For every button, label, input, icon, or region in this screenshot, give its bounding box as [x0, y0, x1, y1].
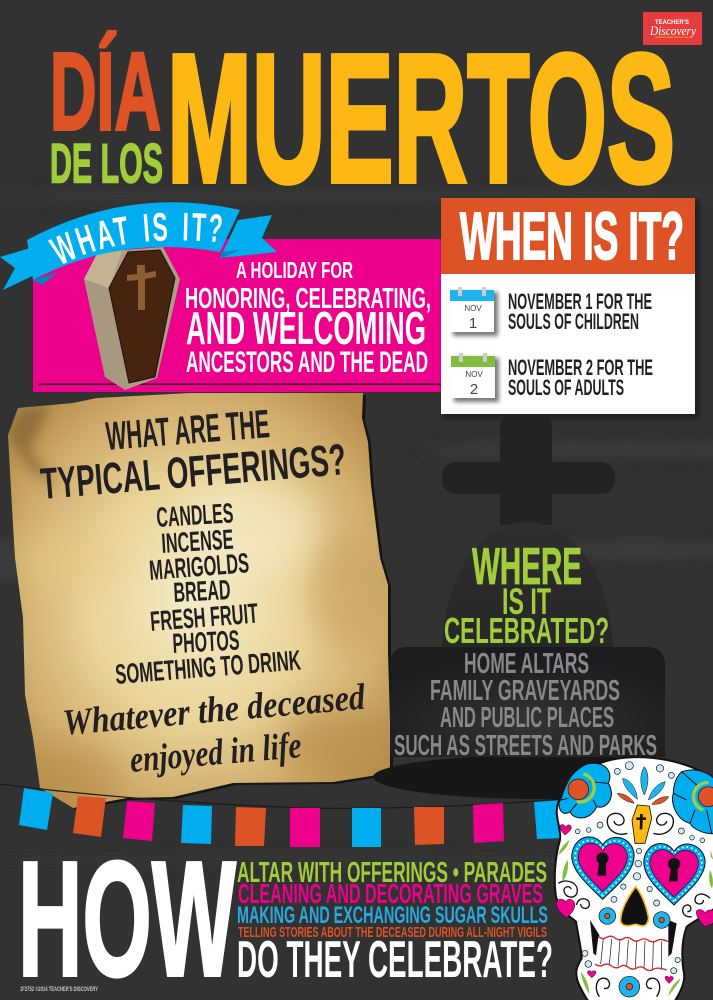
illustration: sugar skull	[555, 757, 713, 1000]
ribbon banner	[0, 202, 277, 290]
how list	[237, 857, 553, 989]
icon: calendar Nov 2: NOV	[465, 370, 483, 379]
top spray	[617, 767, 669, 804]
offerings list: INCENSE	[160, 524, 234, 559]
icon: coffin	[84, 247, 180, 390]
leaves	[558, 840, 713, 996]
tombstone foot	[373, 755, 707, 799]
offerings list: MARIGOLDS	[148, 547, 250, 586]
panel: where tombstone	[373, 415, 707, 799]
offerings heading: WHAT ARE THE	[104, 402, 271, 459]
offerings list: CANDLES	[155, 497, 234, 533]
icon: calendar Nov 1: NOV	[464, 304, 482, 313]
panel: when is it	[441, 198, 699, 418]
where list: HOME ALTARS	[464, 648, 589, 680]
keyholes	[596, 852, 680, 881]
offerings list: PHOTOS	[172, 625, 240, 659]
panel: what is it	[0, 202, 441, 392]
tombstone cross	[442, 415, 615, 525]
offerings heading	[39, 402, 348, 509]
offerings list: BREAD	[173, 574, 231, 608]
date text: November 2	[508, 355, 653, 400]
what is it text: AND WELCOMING	[186, 302, 426, 354]
where list	[394, 648, 657, 762]
what is it text: HONORING, CELEBRATING,	[185, 283, 431, 315]
logo: Teacher's Discovery: teachersdiscovery.com	[655, 35, 689, 39]
offerings list: SOMETHING TO DRINK	[114, 644, 302, 690]
logo: Teacher's Discovery: TEACHER'S	[655, 20, 689, 26]
tombstone base	[390, 647, 665, 757]
icon: calendar Nov 2	[451, 353, 499, 402]
small hearts	[556, 825, 713, 983]
swirls	[558, 813, 710, 997]
date text: November 2: SOULS OF ADULTS	[508, 375, 624, 400]
what is it text	[185, 257, 431, 379]
where heading: IS IT	[502, 581, 551, 622]
where heading: CELEBRATED?	[444, 610, 609, 651]
banner text: WHAT IS IT?	[48, 212, 222, 264]
cheek flowers	[599, 908, 670, 997]
offerings heading: TYPICAL OFFERINGS?	[39, 435, 348, 509]
where heading	[444, 538, 609, 651]
footer credit: 1F2752 ©2014 TEACHER'S DISCOVERY	[20, 986, 98, 993]
teeth	[595, 936, 668, 971]
title word: DE LOS: DE LOS	[50, 132, 163, 194]
title word: DÍA: DÍA	[50, 30, 161, 154]
icon: calendar Nov 1	[450, 287, 498, 336]
forehead coffin	[632, 805, 652, 843]
heart eyes	[572, 837, 705, 905]
offerings list: FRESH FRUIT	[149, 598, 259, 637]
offerings list	[114, 497, 302, 690]
panel: typical offerings parchment	[8, 393, 400, 815]
script note	[61, 677, 367, 781]
jaw shading	[590, 920, 677, 957]
what is it text: A HOLIDAY FOR	[236, 257, 353, 283]
logo: Teacher's Discovery: Discovery	[649, 23, 696, 38]
tombstone dome	[442, 522, 613, 650]
nose	[621, 887, 649, 926]
what is it text: ANCESTORS AND THE DEAD	[186, 346, 428, 379]
icon: calendar Nov 2: 2	[470, 381, 478, 398]
logo: Teacher's Discovery	[643, 12, 702, 45]
script note: enjoyed in life	[128, 725, 303, 781]
where heading: WHERE	[472, 538, 582, 596]
parchment shading	[8, 405, 400, 815]
flowers on cranium	[559, 763, 713, 834]
title	[50, 16, 675, 220]
date text: November 1	[508, 289, 652, 334]
how section	[18, 828, 553, 1000]
icon: calendar Nov 1: 1	[469, 315, 477, 332]
script note: Whatever the deceased	[61, 677, 367, 744]
papel picado banner	[0, 784, 567, 847]
pale dots	[575, 762, 705, 974]
